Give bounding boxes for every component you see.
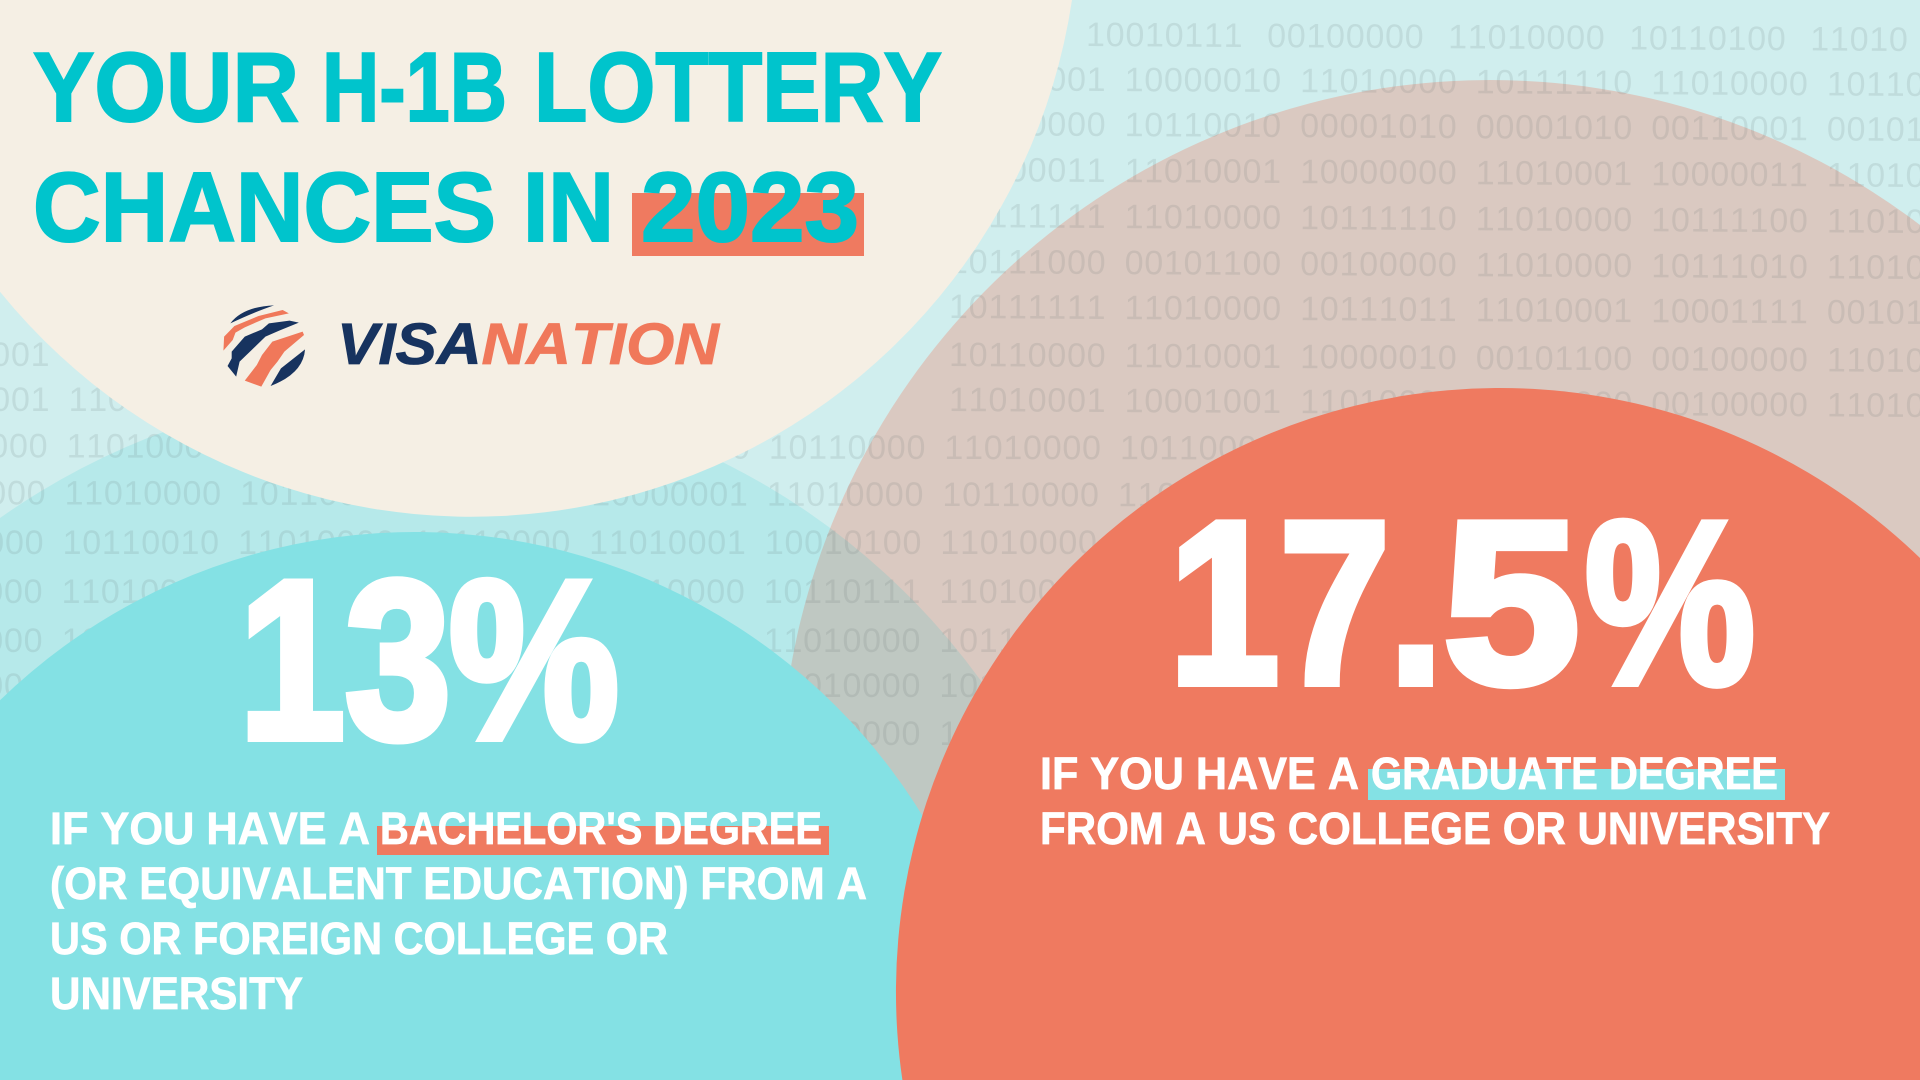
title line 1: YOUR xyxy=(33,32,299,142)
graduate degree description: FROM A US COLLEGE OR UNIVERSITY xyxy=(1040,803,1830,854)
bachelor's degree description xyxy=(50,803,867,1019)
stat: 13 percent xyxy=(239,533,619,786)
graduate degree description: IF YOU HAVE A xyxy=(1040,748,1359,799)
binary code background pattern: 10111111 11010000 10111011 11010001 10001111 00101 xyxy=(949,288,1920,332)
stat: 17.5 percent: % xyxy=(1585,474,1755,733)
title line 1: LOTTERY xyxy=(534,32,942,142)
cream title circle xyxy=(0,0,1072,517)
binary code background pattern: 11010001 10001001 11010000 10110000 00100000 11010 xyxy=(949,381,1920,425)
stat: 13 percent: % xyxy=(449,533,619,786)
highlight behind 2023 xyxy=(632,193,864,256)
binary code background pattern: 10111111 11010000 10111110 11010000 10111100 11010 xyxy=(949,197,1920,241)
bachelor's degree description: UNIVERSITY xyxy=(50,968,303,1019)
graduate degree description xyxy=(1040,748,1830,854)
stat: 17.5 percent xyxy=(1169,474,1755,733)
highlight: graduate degree xyxy=(1368,769,1785,800)
title line 2: CHANCES xyxy=(33,152,496,262)
stat: 17.5 percent: 5 xyxy=(1443,474,1580,733)
stat: 13 percent: 13 xyxy=(239,533,451,786)
binary code background pattern: 10000011 11010001 10000000 11010001 10000011 11010 xyxy=(949,151,1920,195)
binary code background pattern: 10000001 10000010 11010000 10111110 11010000 10110 xyxy=(949,60,1920,104)
tan background circle xyxy=(780,80,1920,1080)
binary code background pattern xyxy=(0,16,1920,753)
bachelor's degree description: US OR FOREIGN COLLEGE OR xyxy=(50,913,668,964)
binary code background pattern: 10110000 11010001 10000010 00101100 00100000 11010 xyxy=(949,336,1920,380)
bachelor's degree description: (OR EQUIVALENT EDUCATION) FROM A xyxy=(50,858,867,909)
binary code background pattern: 10010111 00100000 11010000 10110100 11010 xyxy=(1086,16,1909,59)
binary code background pattern: 10111000 00101100 00100000 11010000 10111010 11010 xyxy=(949,243,1920,287)
title line 1: H-1B xyxy=(322,32,507,142)
title xyxy=(33,32,942,262)
title line 2: 2023 xyxy=(641,152,859,262)
binary code background pattern: 10110000 10110010 00001010 00001010 00110001 00101 xyxy=(949,105,1920,149)
stat: 17.5 percent: 17 xyxy=(1169,474,1390,733)
translucent teal background circle xyxy=(0,388,1115,1080)
coral circle panel xyxy=(896,388,1920,1080)
title line 1 xyxy=(33,32,942,142)
title line 2: IN xyxy=(523,152,614,262)
title line 2 xyxy=(33,152,859,262)
bright teal circle panel xyxy=(0,532,1009,1080)
graduate degree description: GRADUATE DEGREE xyxy=(1371,748,1778,799)
icon: striped globe xyxy=(223,305,305,387)
VisaNation logo xyxy=(223,305,720,387)
stat: 17.5 percent: . xyxy=(1389,474,1443,733)
bachelor's degree description: BACHELOR'S DEGREE xyxy=(380,803,822,854)
logo wordmark: VISANATION xyxy=(337,312,720,377)
highlight: bachelor's degree xyxy=(377,826,829,855)
bachelor's degree description: IF YOU HAVE A xyxy=(50,803,370,854)
